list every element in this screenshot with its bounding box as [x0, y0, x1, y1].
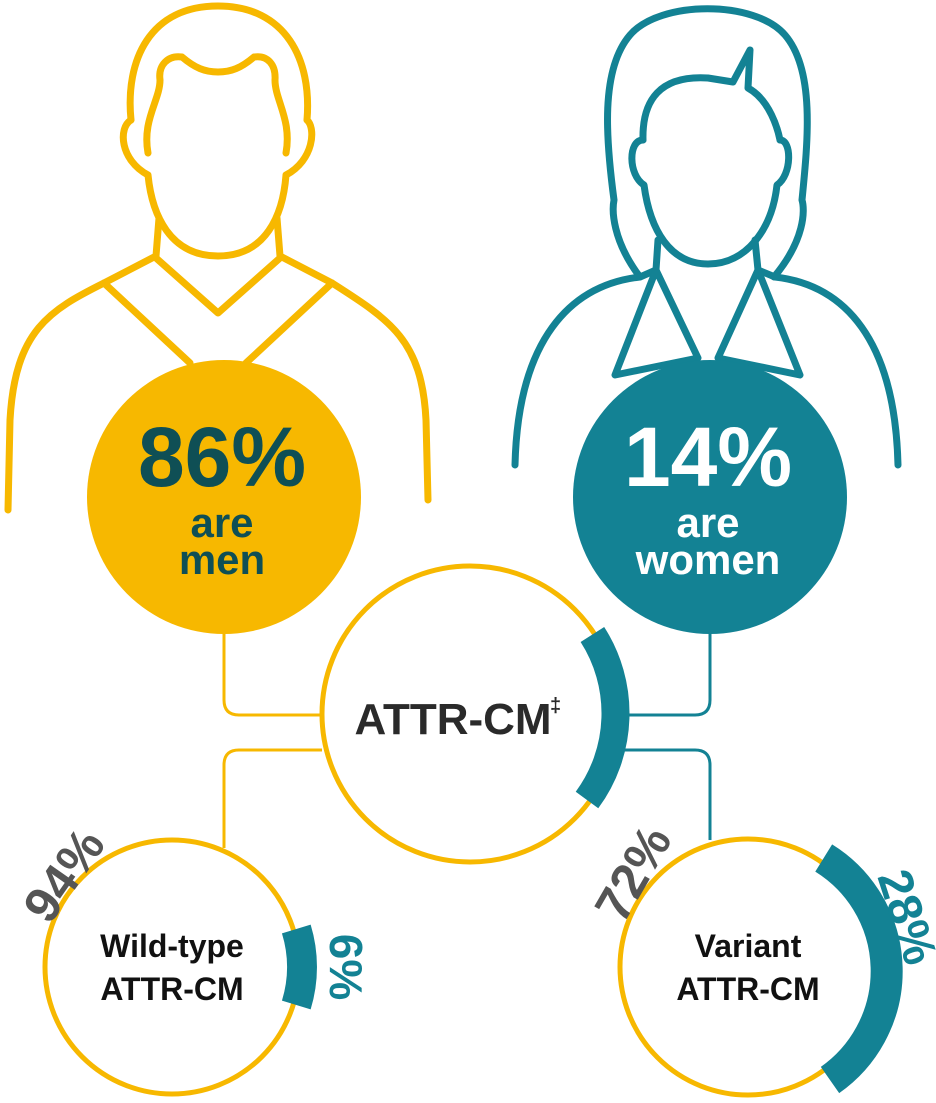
label: 6%: 6% — [320, 934, 372, 1000]
circle: 86% are men: are — [190, 499, 254, 546]
circle: 14% are women: women — [635, 536, 780, 583]
circle: 86% are men — [87, 360, 361, 634]
connector lines — [224, 630, 710, 848]
icon: man figure — [8, 6, 428, 510]
circle: Variant ATTR-CM: ATTR-CM — [676, 971, 820, 1007]
icon: woman figure — [515, 9, 898, 465]
label: 94%: 94% — [12, 818, 116, 932]
circle: Variant ATTR-CM — [620, 839, 887, 1095]
circle: Wild-type ATTR-CM: ATTR-CM — [100, 971, 244, 1007]
circle: ATTR-CM center: ‡ — [550, 695, 561, 717]
circle: Wild-type ATTR-CM: Wild-type — [100, 928, 244, 964]
circle: ATTR-CM center — [322, 566, 618, 862]
circle: ATTR-CM center: ATTR-CM — [354, 695, 552, 744]
circle: 14% are women — [573, 360, 847, 634]
circle: 14% are women: are — [676, 499, 740, 546]
circle: 86% are men: men — [179, 536, 265, 583]
circle: Wild-type ATTR-CM — [45, 840, 302, 1094]
circle: 86% are men: 86% — [138, 410, 306, 504]
circle: Variant ATTR-CM: Variant — [695, 928, 802, 964]
label: 72%: 72% — [584, 816, 683, 931]
circle: 14% are women: 14% — [624, 410, 792, 504]
